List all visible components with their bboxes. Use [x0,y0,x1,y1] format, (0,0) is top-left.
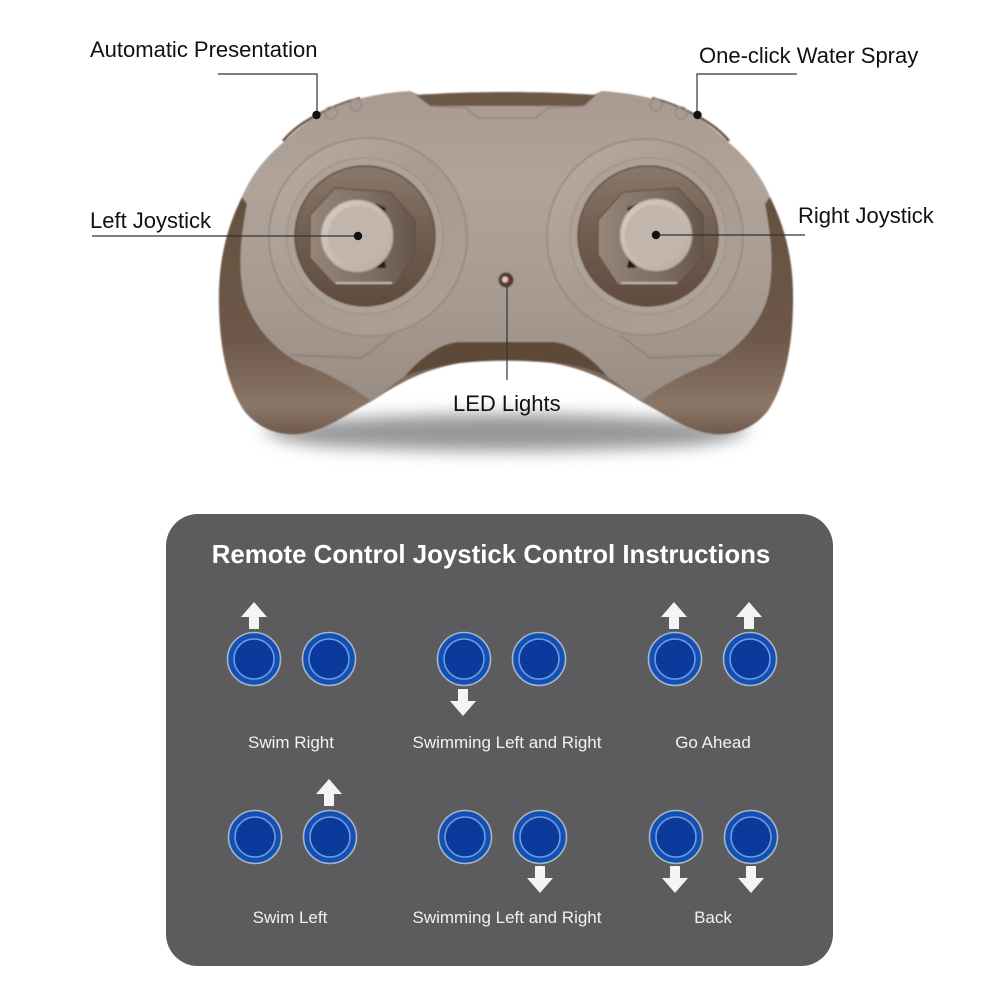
instruction: Swim Right [228,602,356,752]
callout: One-click Water Spray: One-click Water Spray [699,43,918,68]
left lower panel line [290,335,392,358]
LED light [498,272,514,288]
left shoulder edge [283,98,360,141]
callout: One-click Water Spray [693,43,918,119]
instruction: Swim Right: Swim Right [248,733,334,752]
top dark strip [416,92,596,106]
ground shadow [262,414,750,451]
instruction: Back [650,810,778,927]
instruction: Go Ahead: Go Ahead [675,733,751,752]
callout: LED Lights: LED Lights [453,391,561,416]
callout: Right Joystick: Right Joystick [798,203,935,228]
panel: joystick control instructions [166,514,833,966]
light top shell [240,91,772,401]
instruction: Back: Back [694,908,732,927]
instruction: Swimming Left and Right, right stick down: Swimming Left and Right [413,908,602,927]
right shoulder edge [652,98,729,141]
callout: Right Joystick [652,203,935,239]
right lower panel line [620,335,722,358]
callout: LED Lights [453,286,561,416]
right joystick [547,139,743,335]
left joystick [269,138,467,336]
callout: Automatic Presentation [90,37,321,119]
instruction: Swimming Left and Right, right stick down [413,810,602,927]
callout: Left Joystick [90,208,362,240]
callout: Left Joystick: Left Joystick [90,208,212,233]
instruction: Swim Left [228,779,356,927]
instruction: Swimming Left and Right, left stick down: Swimming Left and Right [413,733,602,752]
callout: Automatic Presentation: Automatic Presentation [90,37,317,62]
dark rear shell [219,197,793,434]
shoulder buttons [325,99,687,119]
bottom arch [405,342,607,376]
controller illustration [219,91,793,451]
panel heading: Remote Control Joystick Control Instructions [212,541,770,569]
instruction: Swim Left: Swim Left [253,908,328,927]
top panel inset [430,106,584,118]
instruction: Go Ahead [648,602,776,752]
instruction: Swimming Left and Right, left stick down [413,632,602,752]
